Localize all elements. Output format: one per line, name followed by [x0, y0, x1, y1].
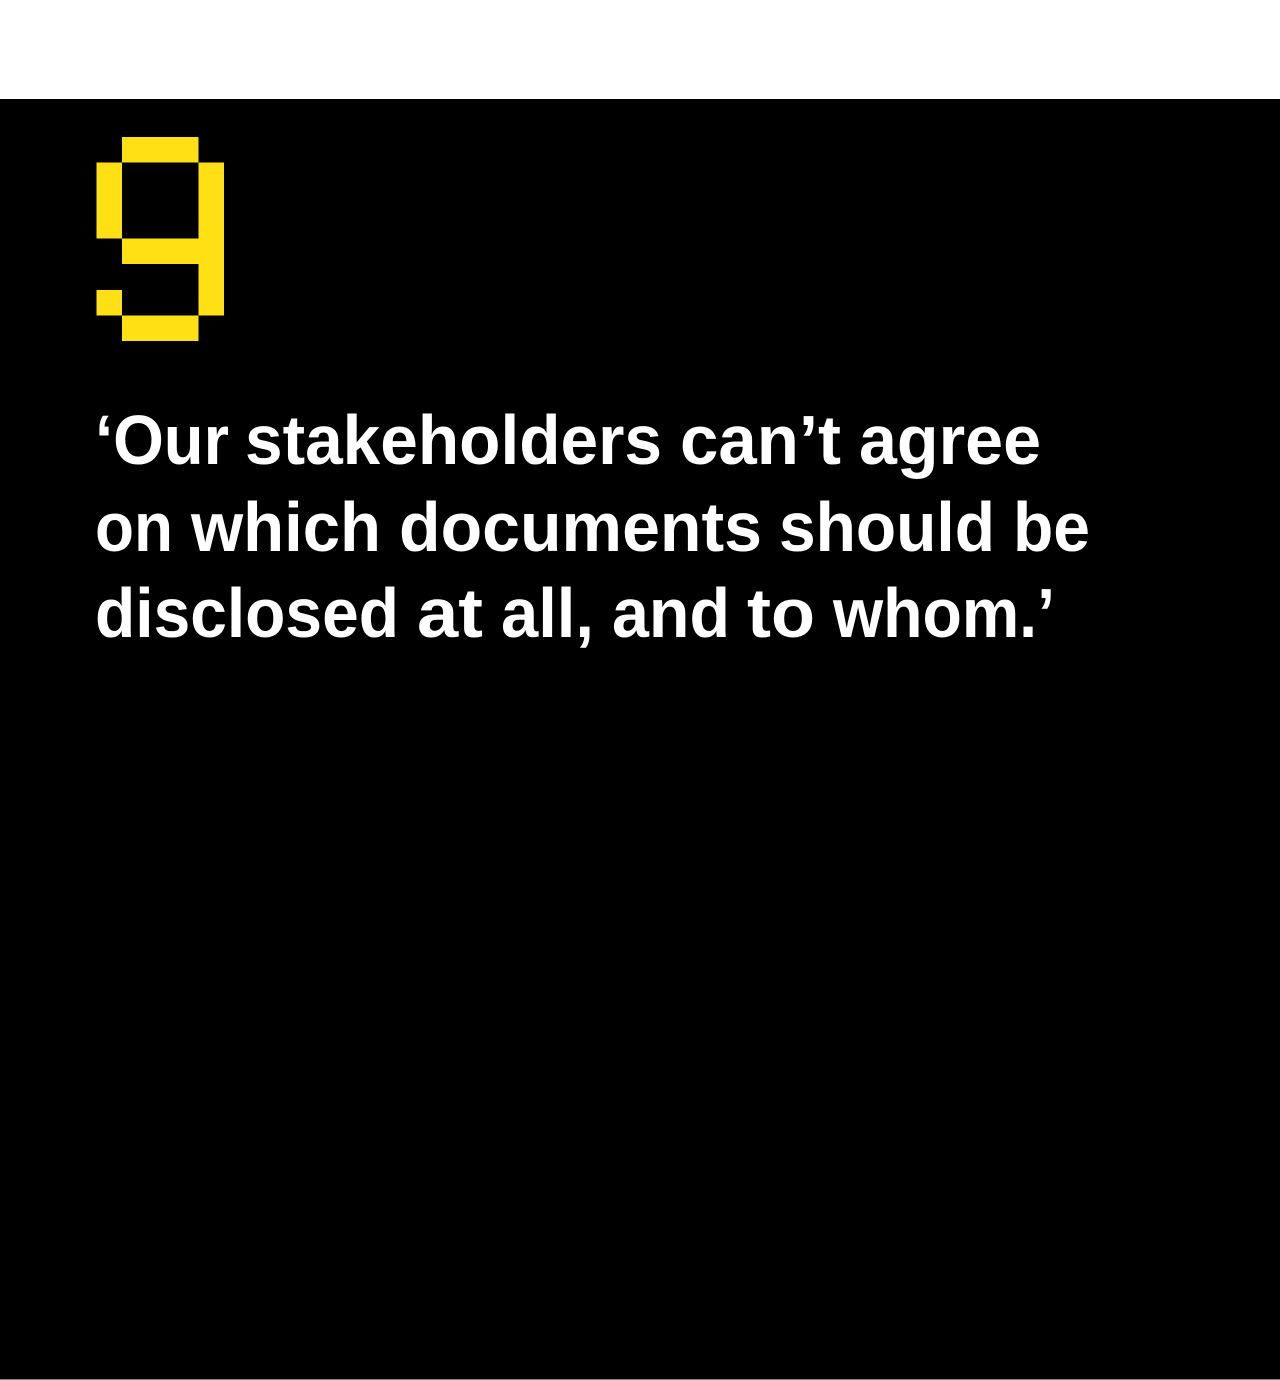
icon: pixel numeral 9 — [96, 137, 224, 341]
quote text: agree — [859, 401, 1041, 479]
quote text: to — [747, 574, 815, 652]
quote text: stakeholders — [245, 401, 662, 479]
quote text: on — [95, 488, 173, 566]
quote text: documents — [399, 488, 762, 566]
quote text: at — [417, 574, 483, 652]
quote text — [95, 401, 1090, 652]
quote text: can’t — [680, 401, 841, 479]
quote text: be — [1013, 488, 1090, 566]
quote text: should — [779, 488, 995, 566]
quote text: all, — [501, 574, 594, 652]
quote text: which — [190, 488, 381, 566]
quote text: whom.’ — [832, 574, 1055, 652]
quote text: disclosed — [95, 574, 399, 652]
quote text: and — [612, 574, 730, 652]
quote text: ‘Our — [95, 401, 229, 479]
